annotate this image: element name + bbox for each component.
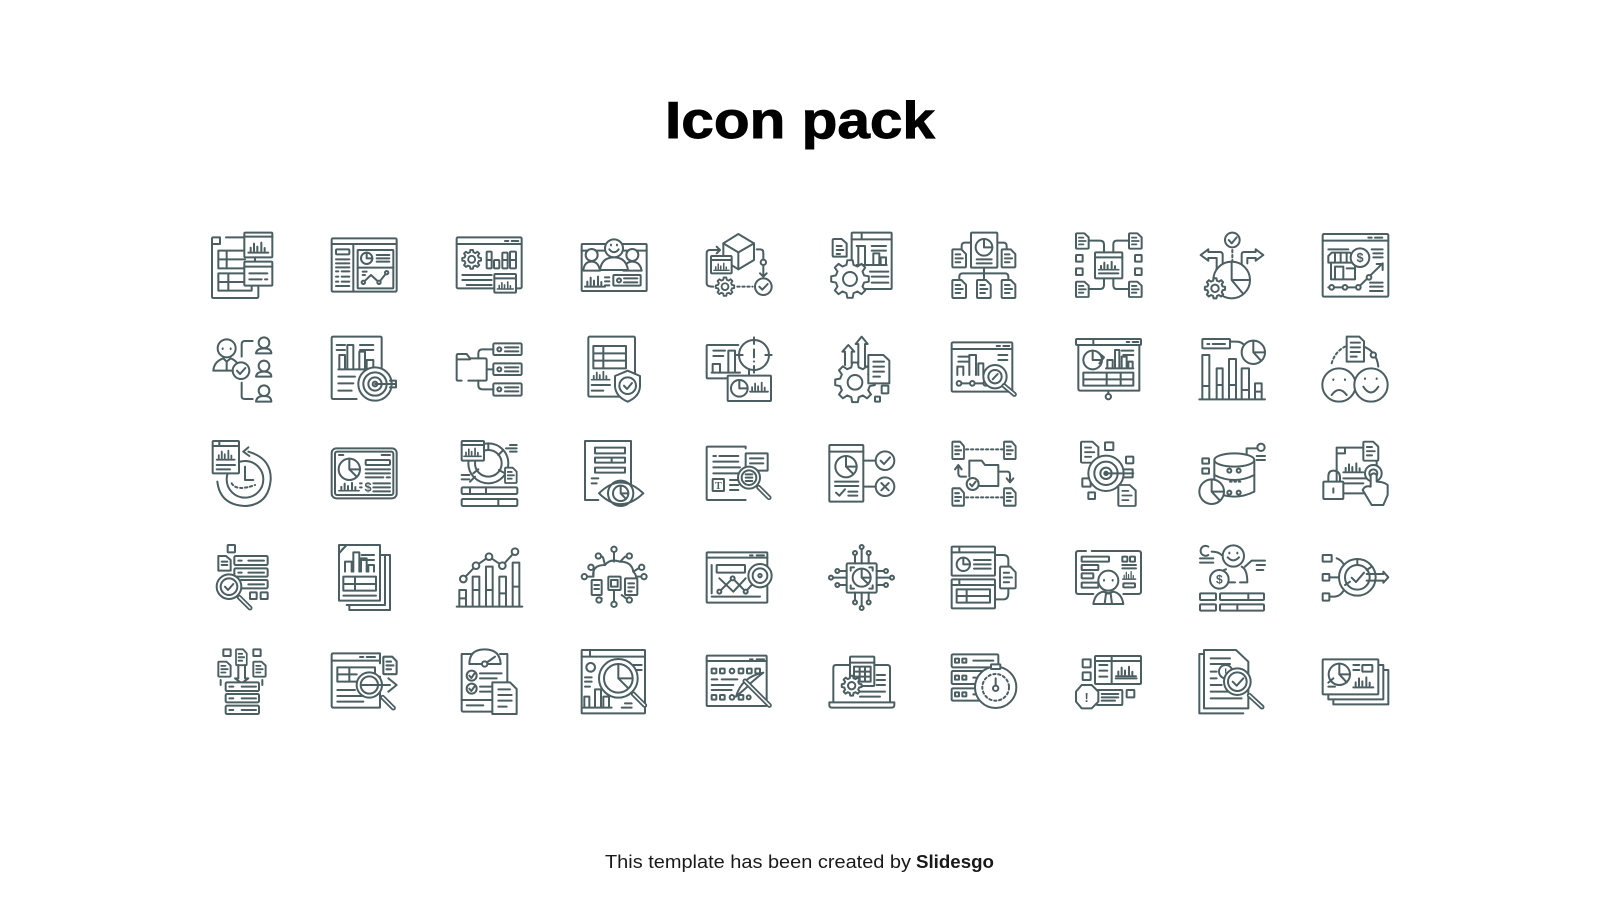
icon: database analytics (1199, 444, 1265, 504)
icon: dashboard window (332, 238, 397, 292)
icon: text document search (707, 447, 769, 500)
icon: linked report windows (952, 547, 1016, 608)
icon: secure touch data access (1323, 442, 1388, 505)
icon grid (212, 233, 1388, 714)
icon: donut data chart (462, 441, 517, 506)
icon: store revenue window: $ (1356, 251, 1364, 265)
icon: target with documents (1081, 442, 1136, 506)
icon: alert data panels (1076, 656, 1141, 708)
icon: layered report cards (1323, 659, 1388, 704)
icon: document org chart (952, 233, 1015, 298)
footer credit: This template has been created by (605, 851, 912, 872)
icon: presentation board (1076, 339, 1141, 399)
icon: settings analytics window (457, 237, 522, 293)
icon: tables with chart panels (212, 233, 272, 298)
icon: laptop calculator gear (829, 657, 894, 708)
icon: cube workflow (707, 234, 772, 296)
icon: server stopwatch (952, 654, 1016, 708)
icon: finance tablet: $ (364, 480, 372, 494)
icon: finance tablet (332, 448, 397, 498)
icon: eye on document (585, 441, 643, 506)
icon: history clock report (213, 441, 271, 506)
icon: data check server magnifier (217, 545, 268, 608)
icon: gear with growth arrows (835, 337, 889, 402)
icon: data mining pickaxe window (707, 656, 769, 706)
icon: alert data panels: ! (1085, 691, 1089, 705)
icon: analytics magnifier window (952, 342, 1014, 394)
icon: document network (1076, 233, 1142, 297)
icon: document audit magnifier: ! (1224, 667, 1227, 678)
icon: document audit magnifier (1199, 650, 1262, 713)
icon: secured report (588, 337, 640, 402)
icon: AI processor chart (829, 545, 894, 610)
icon: customer satisfaction faces (1322, 337, 1388, 402)
icon: person with team check (213, 337, 271, 402)
icon: cloud chip network (582, 547, 647, 607)
icon: workflow check target (1323, 555, 1388, 601)
icon: data stack inputs (218, 649, 266, 714)
icon: stacked report pages (339, 545, 390, 610)
title: Icon pack (665, 92, 935, 150)
icon: chart with target window (707, 552, 772, 603)
icon: team on screen (582, 239, 647, 291)
icon: bar chart with pie (1199, 339, 1265, 399)
icon: alert target with charts (707, 337, 772, 401)
icon: clipboard gauge (462, 649, 517, 714)
icon: text document search: T (715, 481, 722, 492)
icon: store revenue window (1323, 234, 1388, 297)
icon: target report (332, 337, 396, 401)
icon: folder hierarchy (457, 343, 522, 396)
icon: folder document flow (952, 442, 1016, 506)
icon: gear report (831, 233, 892, 298)
icon: presenter dashboard (1076, 551, 1141, 604)
icon: mobile report approval (829, 445, 894, 502)
icon: table magnifier with arrow (332, 653, 397, 708)
icon: decision pie with arrows (1201, 233, 1263, 298)
icon: happy customer revenue (1200, 545, 1265, 611)
icon: growth bar line chart (457, 548, 522, 607)
icon: happy customer revenue: $ (1216, 573, 1223, 587)
icon: analytics magnifier report (582, 650, 645, 713)
footer credit: Slidesgo (916, 851, 994, 872)
